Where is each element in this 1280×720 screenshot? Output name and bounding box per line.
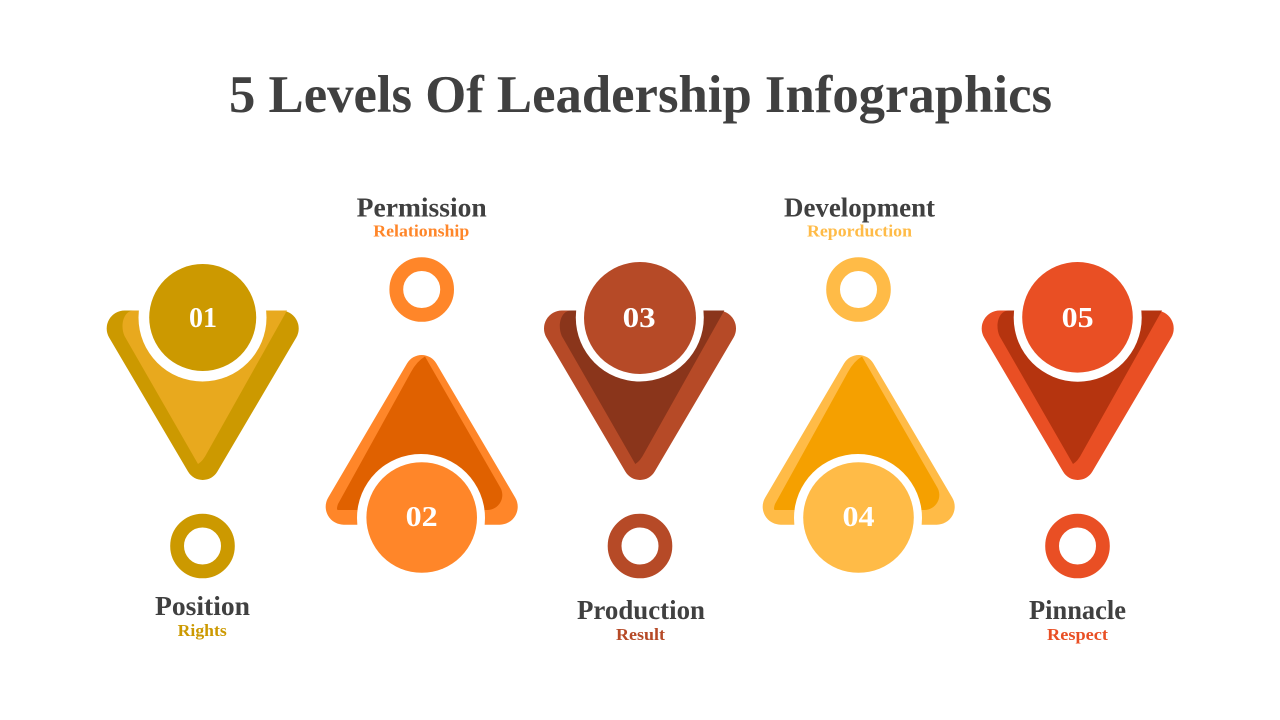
- number badge 02: 02: [406, 501, 438, 533]
- label: Production: Production: [577, 595, 705, 625]
- downward triangle 05: [982, 254, 1174, 480]
- panel: level 01 Position: [107, 254, 299, 640]
- number badge 02: [366, 462, 477, 573]
- number badge 05: 05: [1062, 302, 1094, 334]
- ring icon 05: [1052, 521, 1103, 571]
- panel: level 04 Development: [763, 193, 955, 582]
- title: 5 Levels Of Leadership Infographics: [229, 66, 1052, 124]
- sublabel: Result: Result: [616, 625, 665, 644]
- panel: level 03 Production: [544, 254, 736, 644]
- label: Pinnacle: Pinnacle: [1029, 595, 1126, 625]
- sublabel: Rights: Rights: [178, 621, 227, 640]
- panel: level 05 Pinnacle: [982, 254, 1174, 644]
- number badge 03: 03: [623, 302, 656, 334]
- number badge 01: 01: [189, 302, 217, 334]
- ring icon 01: [177, 521, 228, 571]
- ring icon 02: [396, 264, 447, 315]
- sublabel: Respect: Respect: [1047, 625, 1108, 644]
- number badge 03: [584, 262, 696, 374]
- upward triangle 04: [763, 355, 955, 582]
- panel: level 02 Permission: [326, 193, 518, 582]
- number badge 05: [1022, 262, 1133, 373]
- sublabel: Reporduction: Reporduction: [807, 222, 913, 241]
- label: Permission: Permission: [357, 193, 487, 223]
- number badge 04: 04: [842, 501, 874, 533]
- label: Position: Position: [155, 591, 250, 621]
- sublabel: Relationship: Relationship: [373, 222, 469, 241]
- label: Development: Development: [784, 193, 935, 223]
- ring icon 03: [615, 521, 665, 571]
- number badge 01: [149, 264, 256, 371]
- downward triangle 03: [544, 254, 736, 480]
- downward triangle 01: [107, 254, 299, 480]
- ring icon 04: [833, 264, 884, 315]
- number badge 04: [803, 462, 914, 573]
- upward triangle 02: [326, 355, 518, 582]
